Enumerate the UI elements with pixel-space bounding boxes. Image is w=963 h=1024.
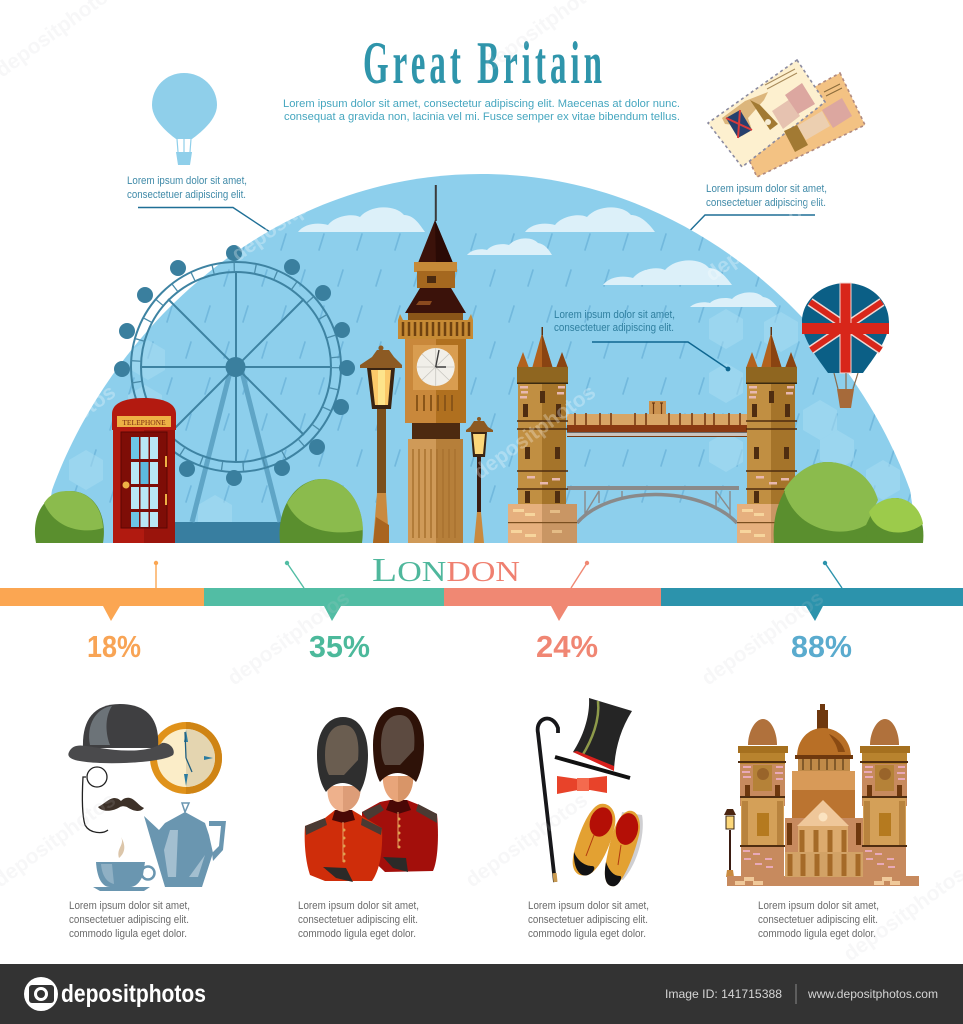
text: guards: consectetuer adipiscing elit. <box>298 914 418 926</box>
illustration: Tower Bridge <box>508 327 806 543</box>
text: accessories <box>528 900 649 940</box>
icon: bow tie <box>557 776 607 794</box>
text: guards <box>298 900 419 940</box>
stat: 35%: 35% <box>309 629 370 664</box>
icon: blue hot air balloon <box>152 73 217 165</box>
illustration: center bush <box>280 479 363 543</box>
icon: teapot <box>144 803 226 887</box>
text: guards: commodo ligula eget dolor. <box>298 928 416 940</box>
rain <box>40 232 920 508</box>
clouds <box>298 207 777 307</box>
callout: postcards <box>677 183 827 244</box>
sky dome <box>44 174 918 543</box>
left building tower <box>738 719 788 877</box>
stat: 24%: 24% <box>536 629 598 664</box>
image id: Image ID: 141715388 <box>665 987 782 1001</box>
right bridge tower <box>737 327 806 543</box>
intro text: Lorem ipsum dolor sit amet, consectetur adipiscing elit. Maecenas at dolor nunc. <box>283 98 680 110</box>
stat: 18%: 18% <box>87 629 141 664</box>
bridge lower arch <box>567 486 739 523</box>
icon: postcards <box>708 60 865 177</box>
intro text: consequat a gravida non, lacinia vel mi. Fusce semper ex vitae bibendum tellus. <box>284 111 680 123</box>
icon: moustache <box>98 798 144 811</box>
illustration: Big Ben <box>398 185 473 543</box>
panel: royal guards <box>305 707 438 882</box>
text: accessories: commodo ligula eget dolor. <box>528 928 646 940</box>
text: guards: Lorem ipsum dolor sit amet, <box>298 900 419 912</box>
segment 24% <box>444 561 661 621</box>
footer logo: depositphotos <box>61 980 206 1008</box>
central block and dome <box>785 704 863 877</box>
text: accessories: consectetuer adipiscing elit. <box>528 914 648 926</box>
timeline bar <box>0 561 963 621</box>
callout: postcards: consectetuer adipiscing elit. <box>706 197 826 209</box>
stock watermarks: depositphotos <box>227 162 358 266</box>
icon: rear guard <box>362 707 438 872</box>
text: building <box>758 900 879 940</box>
segment 88% <box>661 561 963 621</box>
icon: monocle <box>82 767 108 833</box>
hexagon pattern <box>69 309 900 535</box>
heading: London: LON DON <box>372 552 520 589</box>
illustration: large street lamp <box>360 346 402 543</box>
illustration: left bush <box>35 491 104 543</box>
site url: www.depositphotos.com <box>807 987 938 1001</box>
illustration: red telephone box: TELEPHONE <box>122 418 166 427</box>
illustration: right small bush <box>866 498 923 543</box>
illustration: London Eye <box>114 245 355 543</box>
callout: wheel <box>127 175 275 236</box>
stock watermarks: depositphotos <box>223 586 354 690</box>
stock watermarks: depositphotos <box>469 380 600 484</box>
panel: British accessories <box>538 698 643 886</box>
right building tower <box>860 719 910 877</box>
panel: London skyline scene <box>35 174 923 543</box>
illustration: red telephone box <box>112 398 176 543</box>
callout: postcards: Lorem ipsum dolor sit amet, <box>706 183 827 195</box>
illustration: small street lamp <box>466 417 493 543</box>
left bridge tower <box>508 327 577 543</box>
icon: tea cup <box>93 837 154 891</box>
text: building: commodo ligula eget dolor. <box>758 928 876 940</box>
bridge upper walkway <box>567 401 747 437</box>
text: building: Lorem ipsum dolor sit amet, <box>758 900 879 912</box>
text: accessories: Lorem ipsum dolor sit amet, <box>528 900 649 912</box>
text: gentleman <box>69 900 190 940</box>
title: Great Britain <box>363 31 602 97</box>
stock watermarks: depositphotos <box>697 586 828 690</box>
stat: 88%: 88% <box>791 629 852 664</box>
icon: pair of shoes <box>573 804 643 886</box>
text: gentleman: commodo ligula eget dolor. <box>69 928 187 940</box>
intro text <box>283 98 680 123</box>
icon: bowler hat <box>68 704 174 763</box>
stock watermarks: depositphotos <box>461 788 592 892</box>
illustration: right large bush <box>774 462 878 543</box>
footer logo <box>24 977 206 1011</box>
segment 35% <box>204 561 444 621</box>
stock watermarks: depositphotos <box>701 182 832 286</box>
text: gentleman: consectetuer adipiscing elit. <box>69 914 189 926</box>
panel: British gentleman items <box>68 704 226 891</box>
panel: Houses of Parliament style building <box>724 704 919 886</box>
callout: bridge: consectetuer adipiscing elit. <box>554 322 674 334</box>
footer bar <box>0 964 963 1024</box>
callout: wheel: consectetuer adipiscing elit. <box>127 189 246 201</box>
callout: wheel: Lorem ipsum dolor sit amet, <box>127 175 247 187</box>
callout: bridge <box>554 309 730 371</box>
callout: bridge: Lorem ipsum dolor sit amet, <box>554 309 675 321</box>
text: building: consectetuer adipiscing elit. <box>758 914 878 926</box>
segment 18% <box>0 561 204 621</box>
icon: walking cane <box>538 719 558 882</box>
base <box>727 876 919 886</box>
base steps <box>735 877 900 885</box>
icon: Union Jack hot air balloon <box>802 283 889 408</box>
icon: front guard <box>305 717 382 882</box>
small lamp post <box>724 809 736 877</box>
text: gentleman: Lorem ipsum dolor sit amet, <box>69 900 190 912</box>
icon: wall clock <box>150 722 222 794</box>
icon: top hat <box>555 698 632 778</box>
